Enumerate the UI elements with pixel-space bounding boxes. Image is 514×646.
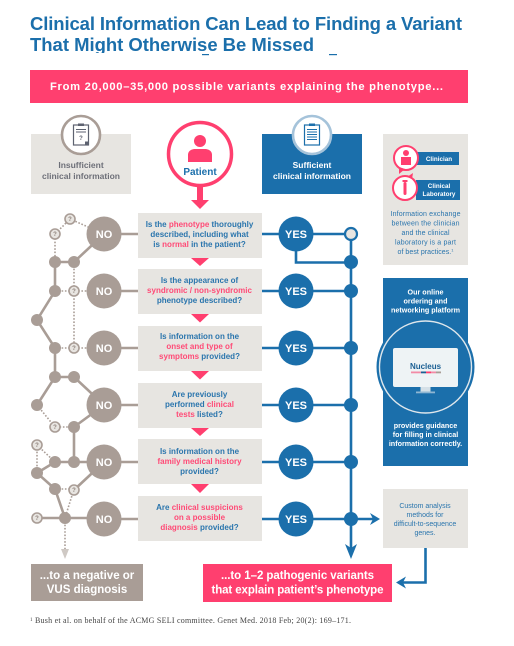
footnote: 1 (30, 618, 33, 623)
question box 1: Is the phenotype thoroughly (146, 220, 254, 229)
question box 6: Are clinical suspicions (156, 503, 243, 512)
YES badges: YES (285, 400, 307, 412)
outcome: pathogenic variants: ...to 1–2 pathogenic variants (221, 570, 374, 582)
question box 2: phenotype described? (157, 296, 242, 305)
question mark nodes: ? (68, 217, 72, 223)
clinical laboratory label: Laboratory (423, 191, 456, 198)
icon: Nucleus monitor: Nucleus (410, 362, 442, 371)
icon: clinician (394, 146, 418, 174)
NO badges: NO (96, 457, 113, 469)
YES badges: YES (285, 457, 307, 469)
question box 1 (138, 213, 262, 258)
question mark nodes: ? (53, 232, 57, 238)
panel: insufficient clinical information: clinical information (42, 171, 120, 181)
question mark nodes: ? (35, 443, 39, 449)
platform text bottom: for filling in clinical (393, 430, 458, 439)
icon: laboratory test tube (393, 173, 417, 200)
question mark nodes: ? (35, 516, 39, 522)
question box 1: is normal in the patient? (153, 240, 246, 249)
NO badges: NO (96, 343, 113, 355)
clinician label: Clinician (426, 156, 452, 163)
title: That Might Otherwise Be Missed (30, 34, 314, 55)
question box 4: Are previously (172, 390, 228, 399)
NO badges (86, 216, 122, 536)
panel: sufficient clinical information (262, 116, 362, 194)
question box 5: family medical history (157, 457, 242, 466)
question mark nodes (32, 214, 79, 523)
outcome: negative or VUS diagnosis (31, 564, 143, 601)
outcome: negative or VUS diagnosis: ...to a negative or (40, 570, 135, 582)
YES badges: YES (285, 286, 307, 298)
information exchange text: 1 (451, 248, 454, 252)
top banner (30, 70, 468, 103)
information exchange text: Information exchange (390, 211, 461, 218)
YES badges: YES (285, 343, 307, 355)
patient circle (168, 122, 232, 186)
question box 2 (138, 269, 262, 314)
question box 3: Is information on the (160, 332, 240, 341)
question mark nodes: ? (72, 289, 76, 295)
arrow: right to custom analysis (370, 513, 380, 525)
information exchange text (390, 211, 461, 256)
clinical laboratory label (416, 180, 460, 200)
question mark nodes: ? (72, 488, 76, 494)
information exchange text: laboratory is a part (395, 240, 456, 246)
panel: custom analysis: difficult-to-sequence (394, 521, 456, 528)
question box 6 (138, 496, 262, 541)
NO badges: NO (96, 229, 113, 241)
question box 1: described, including what (150, 230, 249, 239)
icon: clipboard with question mark: ? (79, 136, 83, 142)
top banner: From 20,000–35,000 possible variants explaining the phenotype... (50, 81, 443, 93)
question box 2: Is the appearance of (161, 276, 239, 285)
question box 4: tests listed? (176, 410, 223, 419)
icon: person (188, 135, 212, 162)
YES badges: YES (285, 514, 307, 526)
platform text bottom (389, 421, 462, 448)
question box 6: diagnosis provided? (160, 523, 239, 532)
panel: online platform (376, 278, 474, 466)
panel: sufficient clinical information: Sufficient (293, 160, 332, 170)
platform text bottom: provides guidance (394, 421, 457, 430)
question box 6: on a possible (174, 513, 226, 522)
icon: completed clipboard (293, 116, 331, 154)
question box 4 (138, 383, 262, 428)
NO badges: NO (96, 400, 113, 412)
outcome: pathogenic variants: that explain patient’s phenotype (212, 584, 384, 596)
information exchange text: between the clinician (392, 220, 460, 228)
arrow: down to pathogenic variants (345, 544, 357, 559)
footnote: Bush et al. on behalf of the ACMG SELI committee. Genet Med. 2018 Feb; 20(2): 169–171. (33, 616, 351, 625)
panel: custom analysis: Custom analysis (399, 503, 451, 510)
clinical laboratory label: Clinical (428, 183, 450, 190)
title: Clinical Information Can Lead to Finding a Variant (30, 13, 462, 34)
outcome: pathogenic variants (203, 564, 392, 602)
question box 5: provided? (180, 467, 219, 476)
question box 3: onset and type of (166, 342, 233, 351)
panel: sufficient clinical information: clinical information (273, 171, 351, 181)
insufficient pathway tree (31, 214, 138, 559)
NO badges: NO (96, 514, 113, 526)
NO badges: NO (96, 286, 113, 298)
title (30, 13, 462, 56)
panel: custom analysis: methods for (407, 512, 444, 519)
arrow: custom analysis to pathogenic variants (396, 548, 426, 588)
panel: insufficient clinical information (31, 116, 131, 194)
panel: insufficient clinical information: Insufficient (58, 160, 104, 170)
information exchange text: of best practices. (398, 249, 451, 256)
panel: custom analysis (383, 489, 468, 548)
question mark nodes: ? (53, 425, 57, 431)
icon: Nucleus monitor (393, 348, 458, 393)
platform text top (391, 288, 460, 314)
sufficient pathway (262, 228, 380, 559)
question box 5: Is information on the (160, 447, 240, 456)
platform text top: networking platform (391, 306, 460, 314)
question box 3: symptoms provided? (159, 352, 240, 361)
question mark nodes: ? (72, 346, 76, 352)
information exchange text: and the clinical (402, 230, 450, 237)
platform text bottom: information correctly. (389, 439, 462, 448)
YES badges: YES (285, 229, 307, 241)
platform text top: ordering and (404, 296, 447, 306)
question box 5 (138, 439, 262, 484)
arrow: patient to first question (191, 186, 209, 209)
YES badges (278, 216, 314, 536)
outcome: negative or VUS diagnosis: VUS diagnosis (47, 584, 127, 596)
pink arrows between questions (191, 258, 209, 493)
question box 2: syndromic / non-syndromic (147, 286, 253, 295)
panel: custom analysis: genes. (414, 530, 436, 537)
question box 3 (138, 326, 262, 371)
arrow: down to negative diagnosis (61, 549, 69, 559)
question box 4: performed clinical (165, 400, 234, 409)
panel: information exchange (383, 134, 468, 265)
platform text top: Our online (408, 288, 443, 296)
patient circle: Patient (183, 167, 217, 178)
